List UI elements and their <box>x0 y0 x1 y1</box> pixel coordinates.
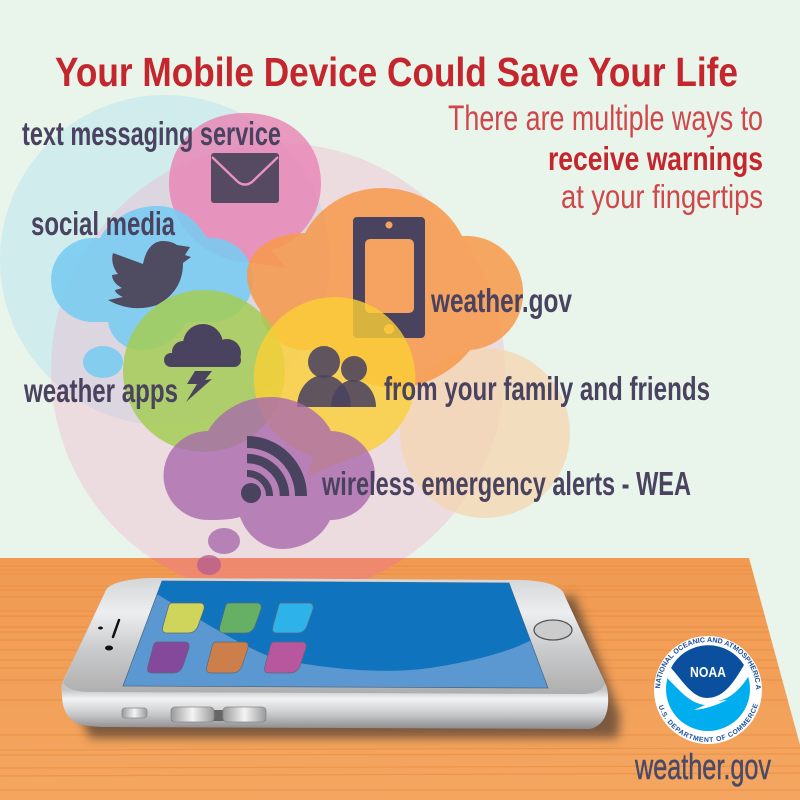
label: social media: social media <box>31 205 175 242</box>
label: text messaging service: text messaging service <box>22 115 281 152</box>
NOAA logo: U.S. DEPARTMENT OF COMMERCE <box>659 704 758 742</box>
phone shadow <box>80 595 620 738</box>
phone top face <box>63 578 605 694</box>
bubble: family and friends <box>254 297 415 476</box>
table overlap tint <box>151 558 405 579</box>
speaker and camera <box>98 620 119 650</box>
large pale peach circle <box>400 348 570 518</box>
app icons <box>148 603 313 673</box>
bubble on table <box>197 555 221 575</box>
bubble: weather.gov cloud <box>247 188 523 388</box>
bubble: social media cloud <box>51 206 253 378</box>
phone body edge <box>62 578 608 729</box>
icon: twitter bird <box>108 241 191 308</box>
icon: storm cloud <box>164 324 241 402</box>
label: weather.gov: weather.gov <box>430 282 572 319</box>
bubble: weather apps <box>123 290 285 452</box>
bubble: wireless alerts cloud <box>164 397 375 554</box>
NOAA logo: NOAA <box>690 664 726 681</box>
large pale pink circle <box>51 143 505 597</box>
large pale blue circle <box>0 95 330 425</box>
table <box>0 558 800 800</box>
subtitle: at your fingertips <box>561 178 763 215</box>
seal ring text: NATIONAL OCEANIC AND ATMOSPHERIC ADMINISTRATION <box>655 637 761 690</box>
home button <box>534 620 572 640</box>
icon: mobile device <box>353 217 425 338</box>
smartphone <box>62 578 620 738</box>
icon: envelope <box>211 153 279 203</box>
subtitle <box>448 99 763 215</box>
seal disc <box>666 647 750 731</box>
bubble: text messaging <box>169 113 321 268</box>
side buttons <box>122 707 266 722</box>
icon: people <box>297 346 376 407</box>
label: weather apps: weather apps <box>23 372 178 409</box>
screen <box>123 581 548 688</box>
icon: wifi <box>241 442 301 503</box>
